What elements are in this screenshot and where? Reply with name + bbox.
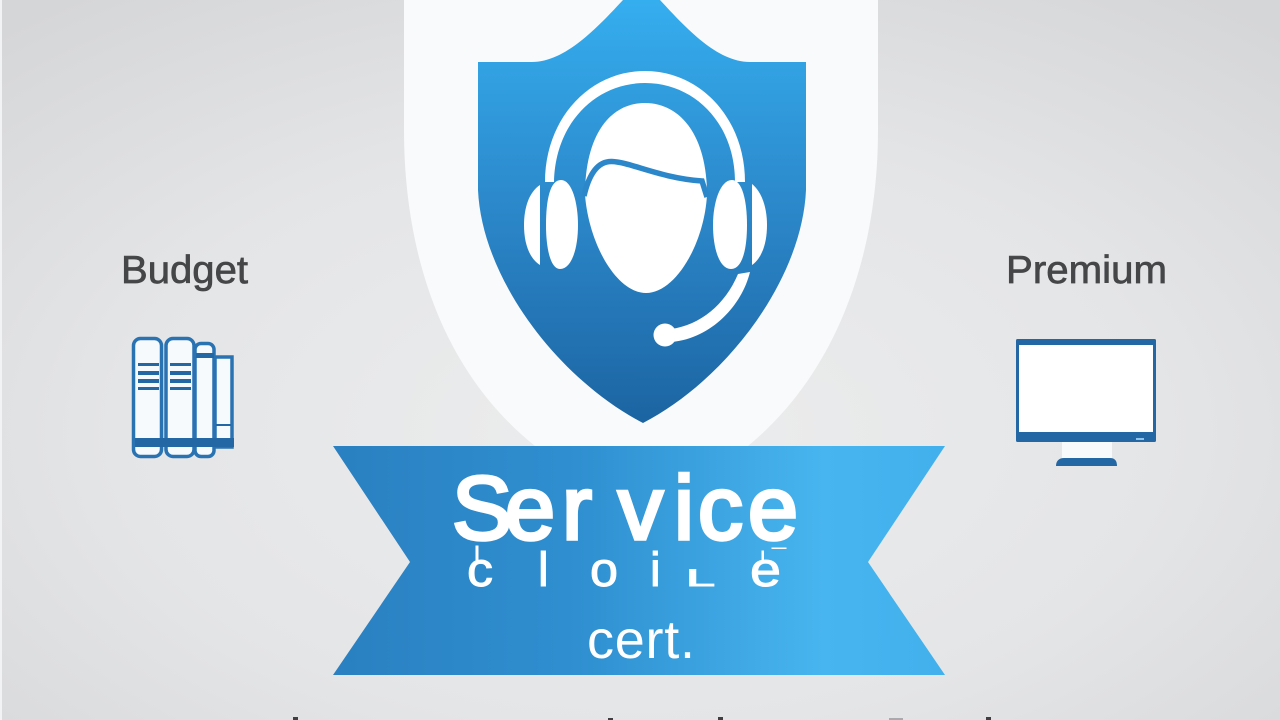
stand neck [1062, 442, 1112, 459]
label: Budget: Budget [121, 249, 248, 292]
head [585, 103, 707, 293]
left ear cup [524, 180, 578, 269]
ribbon caption: cert. [587, 610, 695, 670]
microphone boom [654, 272, 750, 346]
shield [478, 0, 806, 423]
book 3 [195, 344, 214, 456]
book 4 [215, 357, 232, 447]
monitor frame [1016, 339, 1156, 442]
label: Premium: Premium [1006, 249, 1167, 292]
ribbon subtitle: e [750, 544, 781, 597]
icon: shield with headset agent [478, 0, 806, 423]
ribbon shape [333, 446, 945, 675]
ribbon title: Service [452, 459, 798, 559]
monitor screen [1019, 345, 1153, 432]
book 1 [134, 338, 162, 456]
ribbon subtitle: i [650, 544, 661, 597]
ribbon banner [333, 446, 945, 675]
book bands [135, 353, 234, 447]
power light [1136, 438, 1144, 440]
clipped bottom caption marks [293, 717, 991, 720]
icon: books [134, 338, 234, 456]
ribbon subtitle: c [467, 544, 493, 597]
ribbon subtitle: o [590, 544, 618, 597]
icon: monitor [1016, 339, 1156, 466]
book 2 [166, 338, 194, 456]
headband [545, 71, 745, 182]
hair line [584, 161, 707, 197]
ribbon subtitle: l [538, 544, 549, 597]
ribbon subtitle [467, 544, 786, 597]
white arch behind shield [404, 0, 878, 446]
stand base [1056, 458, 1117, 466]
ribbon subtitle: L [686, 565, 715, 592]
right ear cup [713, 180, 767, 269]
